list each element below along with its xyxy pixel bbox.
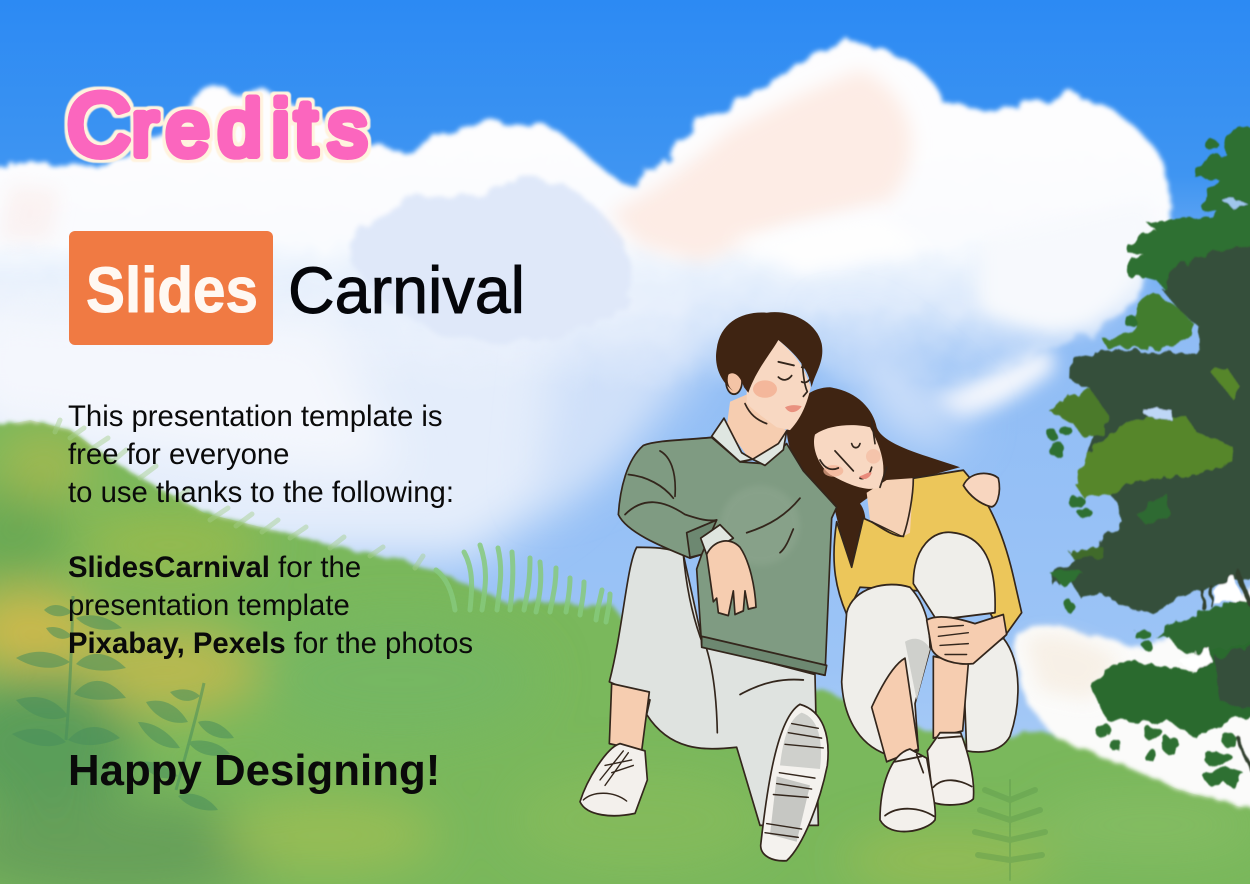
- man collar: [712, 418, 787, 465]
- logo word Slides: Slides: [86, 254, 258, 326]
- man shoe sole: [761, 704, 828, 861]
- fern A: [12, 596, 126, 746]
- man: [580, 312, 837, 861]
- woman lips: [859, 472, 872, 479]
- woman far hip: [963, 638, 1018, 752]
- woman face: [814, 425, 883, 489]
- background: left ferns: [12, 596, 234, 810]
- man hand: [707, 541, 756, 616]
- woman chest: [867, 478, 913, 536]
- logo: SlidesCarnival: [69, 231, 525, 345]
- credits text block: free for everyone: [68, 438, 289, 471]
- background: right fern: [975, 780, 1045, 880]
- man hair: [716, 312, 822, 393]
- woman shin shade: [905, 639, 930, 700]
- background: hill edge tufts: [55, 420, 423, 568]
- closing line: Happy Designing!: Happy Designing!: [68, 746, 440, 795]
- tree upper foliage: [1125, 124, 1250, 302]
- woman raised knee: [913, 532, 995, 620]
- man face: [747, 340, 811, 430]
- credits text block: presentation template: [68, 589, 350, 622]
- man sweater: [618, 437, 837, 675]
- man sleeve cuff: [687, 520, 717, 557]
- woman shoes: [927, 733, 974, 805]
- title: Credits: Credits: [67, 75, 367, 174]
- tree light foliage: [1103, 293, 1194, 350]
- credits text block: [68, 400, 473, 660]
- man's hand on shoulder: [963, 473, 999, 507]
- credits text block: Pixabay, Pexels for the photos: [68, 627, 473, 660]
- tree lower foliage: [1156, 601, 1250, 658]
- woman clasped hands: [927, 615, 1007, 664]
- man neck: [727, 395, 787, 460]
- background: grass tufts: [436, 545, 610, 622]
- logo orange badge: [69, 231, 273, 345]
- credits text block: to use thanks to the following:: [68, 476, 454, 509]
- tree sky gaps: [1142, 408, 1173, 420]
- man skin leg: [609, 684, 649, 751]
- logo word Carnival: Carnival: [288, 253, 525, 327]
- fern B: [138, 683, 234, 810]
- tree dark canopy: [1052, 241, 1250, 614]
- woman near leg: [842, 585, 930, 754]
- tree branches: [1202, 571, 1250, 771]
- tree leaf clusters: [1048, 139, 1243, 786]
- man lips: [785, 405, 802, 412]
- woman hair back: [787, 387, 960, 567]
- tree: [1048, 124, 1250, 786]
- man pants: [609, 547, 818, 825]
- woman skin legs: [872, 658, 918, 762]
- illustration: couple sitting: [580, 312, 1022, 861]
- credits text block: This presentation template is: [68, 400, 443, 433]
- man left shoe: [580, 744, 647, 816]
- woman yellow top: [834, 470, 1022, 638]
- credits text block: SlidesCarnival for the: [68, 551, 361, 584]
- woman: [787, 387, 1022, 832]
- background: grassy hill: [0, 420, 1250, 884]
